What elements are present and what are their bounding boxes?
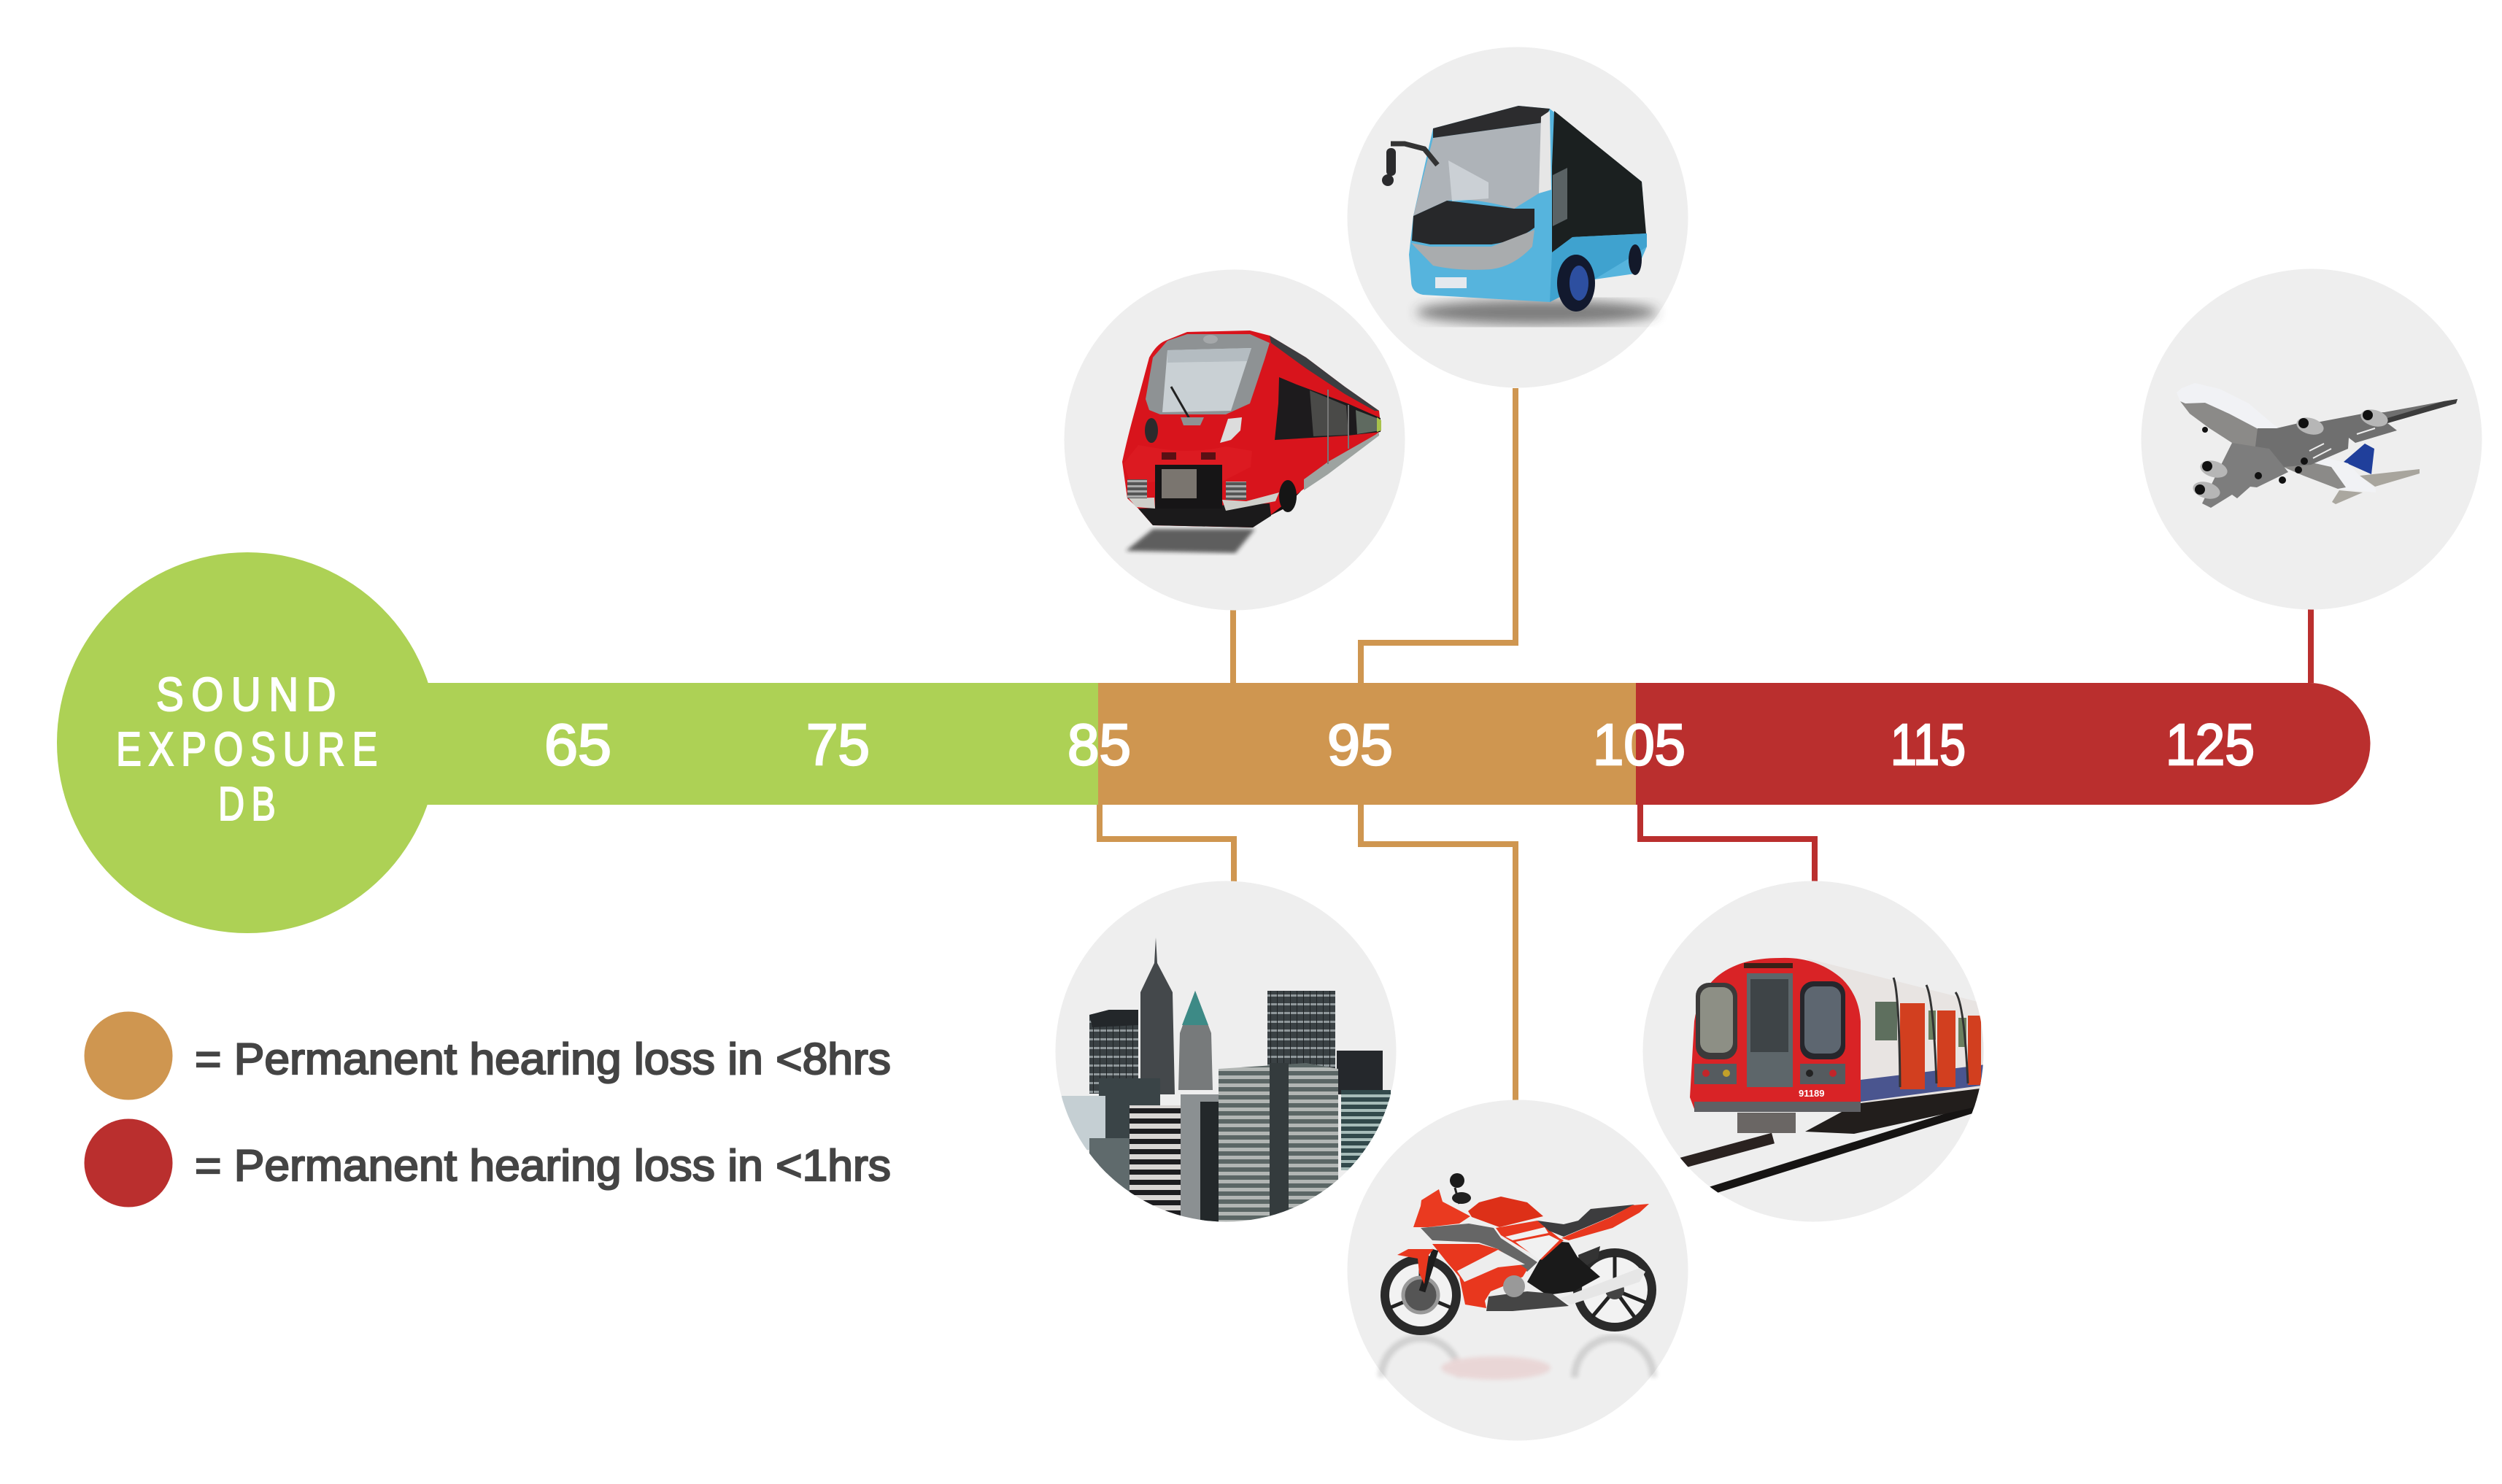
- icon: jet airplane: [2141, 268, 2482, 610]
- icon: electric train: [1064, 270, 1405, 610]
- icon: blue bus: [1347, 47, 1688, 388]
- legend item: red: = Permanent hearing loss in <1hrs: [195, 1141, 891, 1190]
- scale numbers: 115: [1891, 712, 1966, 777]
- scale numbers: 105: [1593, 712, 1686, 777]
- scale numbers: [544, 712, 2255, 777]
- scale numbers: 75: [806, 712, 870, 777]
- heading: sound exposure db: [116, 668, 385, 830]
- decibel scale bar: [57, 552, 2371, 933]
- heading: sound exposure db: DB: [218, 777, 282, 830]
- icon: red motorcycle: [1347, 1100, 1688, 1440]
- legend item: orange: [85, 1011, 891, 1100]
- scale numbers: 85: [1067, 712, 1131, 777]
- connector: underground train to 105 dB: [1640, 805, 1815, 881]
- connector: motorcycle to 95 dB: [1361, 805, 1516, 1100]
- scale numbers: 125: [2166, 712, 2255, 777]
- connector: airplane to 125 dB: [2308, 609, 2314, 683]
- icon: underground train: 91189: [1799, 1088, 1824, 1099]
- motorcycle reflection: [1381, 1338, 1653, 1380]
- legend item: red: [85, 1119, 891, 1207]
- legend item: orange: = Permanent hearing loss in <8hrs: [195, 1035, 891, 1083]
- scale numbers: 65: [544, 712, 611, 777]
- icon: city skyline: [1055, 881, 1397, 1226]
- scale numbers: 95: [1327, 712, 1393, 777]
- green segment with header circle: [57, 552, 1098, 933]
- heading: sound exposure db: SOUND: [156, 668, 344, 721]
- connector: city to 85 dB: [1100, 805, 1234, 881]
- red segment: [1636, 683, 2371, 805]
- connector: train to 88 dB: [1230, 610, 1236, 683]
- heading: sound exposure db: EXPOSURE: [116, 722, 385, 776]
- icon: underground train: [1643, 881, 1992, 1221]
- connector: bus to 95 dB: [1361, 388, 1516, 683]
- legend: [85, 1011, 891, 1207]
- orange segment: [1098, 683, 1636, 805]
